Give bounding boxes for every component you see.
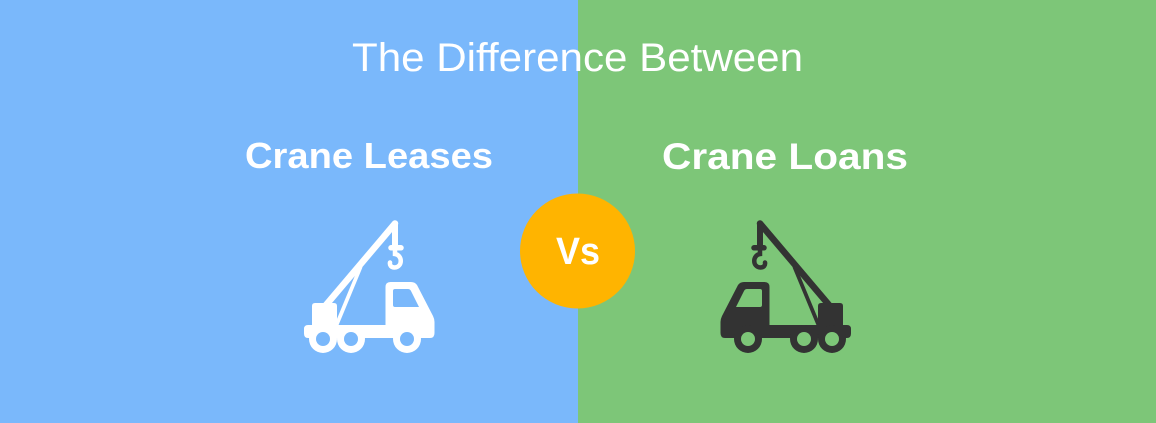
title: The Difference Between <box>352 36 803 80</box>
icon: white crane truck <box>304 224 434 353</box>
icon: dark crane truck <box>720 224 851 353</box>
heading: Crane Loans: Crane Loans <box>662 136 908 177</box>
panel: right green background <box>578 0 1156 423</box>
panel: left blue background <box>0 0 578 423</box>
vs badge: Vs <box>556 231 600 273</box>
heading: Crane Leases: Crane Leases <box>245 135 493 176</box>
vs badge <box>520 194 635 308</box>
